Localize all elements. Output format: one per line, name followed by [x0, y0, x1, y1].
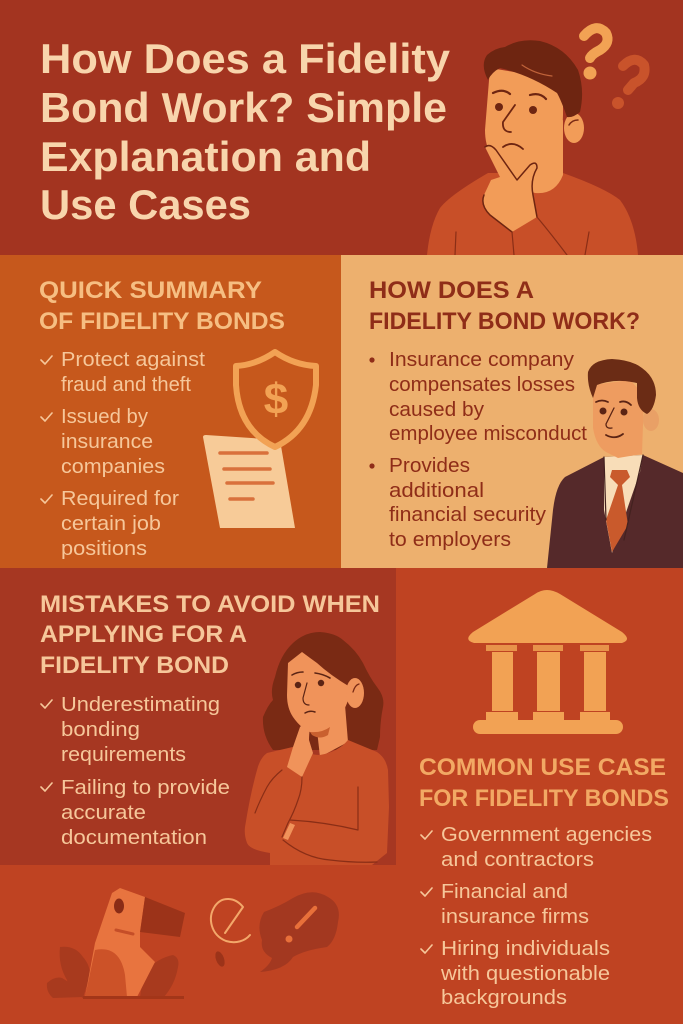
- list: how it works: Provides: [389, 454, 470, 477]
- list: quick summary: Required for: [61, 487, 179, 510]
- panel: bottom left illustration: [0, 865, 396, 1024]
- list: quick summary: positions: [61, 537, 147, 560]
- list: common use case: with questionable: [440, 962, 610, 985]
- panel: mistakes to avoid: [0, 568, 396, 865]
- heading: common use case: [419, 754, 669, 812]
- list: mistakes to avoid: [41, 693, 230, 849]
- list: mistakes to avoid: Failing to provide: [61, 776, 230, 799]
- list: how it works: Insurance company: [389, 348, 575, 371]
- list: mistakes to avoid: requirements: [61, 743, 186, 766]
- list: mistakes to avoid: Underestimating: [61, 693, 220, 716]
- heading: how it works: [369, 277, 640, 335]
- title: How Does a Fidelity: [40, 35, 451, 82]
- list: how it works: employee misconduct: [389, 422, 587, 445]
- icon: bank building: [468, 590, 627, 734]
- panel: quick summary: [0, 255, 341, 568]
- title: Bond Work? Simple: [40, 84, 447, 131]
- illustration: worried woman: [245, 632, 389, 865]
- icon: speech blob with exclamation: [259, 892, 339, 972]
- icon: document: [203, 435, 295, 528]
- panel: common use case: [396, 568, 683, 1024]
- heading: quick summary: QUICK SUMMARY: [39, 277, 262, 304]
- heading: quick summary: OF FIDELITY BONDS: [39, 308, 285, 335]
- list: common use case: insurance firms: [441, 905, 589, 928]
- list: common use case: Financial and: [441, 880, 568, 903]
- illustration: thinking man: [427, 28, 645, 255]
- list: quick summary: [41, 348, 205, 560]
- panel: how it works: [341, 255, 683, 568]
- heading: mistakes to avoid: FIDELITY BOND: [40, 652, 229, 679]
- icon: question mark: [584, 28, 608, 80]
- icon: small question mark: [612, 60, 645, 109]
- list: mistakes to avoid: bonding: [61, 718, 140, 741]
- list: common use case: [421, 823, 652, 1009]
- list: mistakes to avoid: accurate: [61, 801, 146, 824]
- heading: mistakes to avoid: APPLYING FOR A: [40, 621, 247, 648]
- list: how it works: compensates losses: [389, 373, 575, 396]
- panel: header: [0, 0, 683, 255]
- icon: thin e-shaped swirl: [211, 899, 250, 968]
- list: quick summary: certain job: [61, 512, 161, 535]
- icon: shield with dollar: $: [264, 375, 288, 424]
- list: quick summary: insurance: [61, 430, 153, 453]
- title: [40, 35, 451, 228]
- heading: how it works: HOW DOES A: [369, 277, 534, 304]
- list: how it works: to employers: [389, 528, 511, 551]
- list: quick summary: fraud and theft: [61, 373, 191, 396]
- list: common use case: and contractors: [441, 848, 594, 871]
- list: quick summary: Issued by: [61, 405, 149, 428]
- heading: how it works: FIDELITY BOND WORK?: [369, 308, 640, 335]
- list: mistakes to avoid: documentation: [61, 826, 207, 849]
- list: common use case: Hiring individuals: [441, 937, 610, 960]
- list: common use case: Government agencies: [441, 823, 652, 846]
- heading: common use case: FOR FIDELITY BONDS: [419, 785, 669, 812]
- list: common use case: backgrounds: [441, 986, 567, 1009]
- list: how it works: caused by: [389, 398, 485, 421]
- list: quick summary: companies: [61, 455, 165, 478]
- list: how it works: [369, 348, 587, 551]
- title: Explanation and: [40, 133, 371, 180]
- heading: mistakes to avoid: [40, 591, 380, 679]
- title: Use Cases: [40, 181, 251, 228]
- heading: mistakes to avoid: MISTAKES TO AVOID WHEN: [40, 591, 380, 618]
- illustration: abstract bird and leaves: [47, 888, 185, 999]
- heading: common use case: COMMON USE CASE: [419, 754, 666, 781]
- illustration: businessman: [547, 359, 683, 568]
- heading: quick summary: [39, 277, 285, 335]
- list: how it works: additional: [389, 479, 484, 502]
- list: quick summary: Protect against: [61, 348, 205, 371]
- icon: shield with dollar: [236, 352, 316, 447]
- list: how it works: financial security: [389, 503, 547, 526]
